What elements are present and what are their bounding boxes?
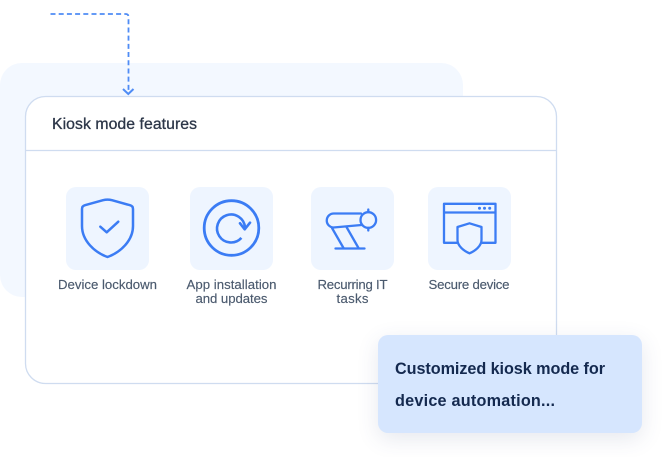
label: App installation (186, 277, 276, 292)
icon tile: browser shield (428, 187, 511, 270)
dashed arrow (50, 14, 134, 94)
label: Recurring IT (318, 277, 388, 292)
callout: device automation... (395, 392, 555, 410)
feature: recurring IT tasks (311, 187, 394, 306)
background panel (0, 63, 463, 297)
callout: Customized kiosk mode for (395, 360, 606, 378)
label: Secure device (428, 277, 510, 292)
callout (378, 335, 642, 433)
label (318, 277, 388, 306)
feature: device lockdown (58, 187, 157, 292)
feature: secure device (428, 187, 511, 292)
label (186, 277, 276, 306)
icon tile: shield check (66, 187, 149, 270)
feature: app installation and updates (186, 187, 276, 306)
heading: Kiosk mode features (52, 116, 197, 133)
label: tasks (336, 291, 369, 306)
label: and updates (196, 291, 268, 306)
icon tile: robot arm (311, 187, 394, 270)
icon tile: update circle (190, 187, 273, 270)
label: Device lockdown (58, 277, 157, 292)
panel: kiosk mode features card (26, 96, 556, 384)
